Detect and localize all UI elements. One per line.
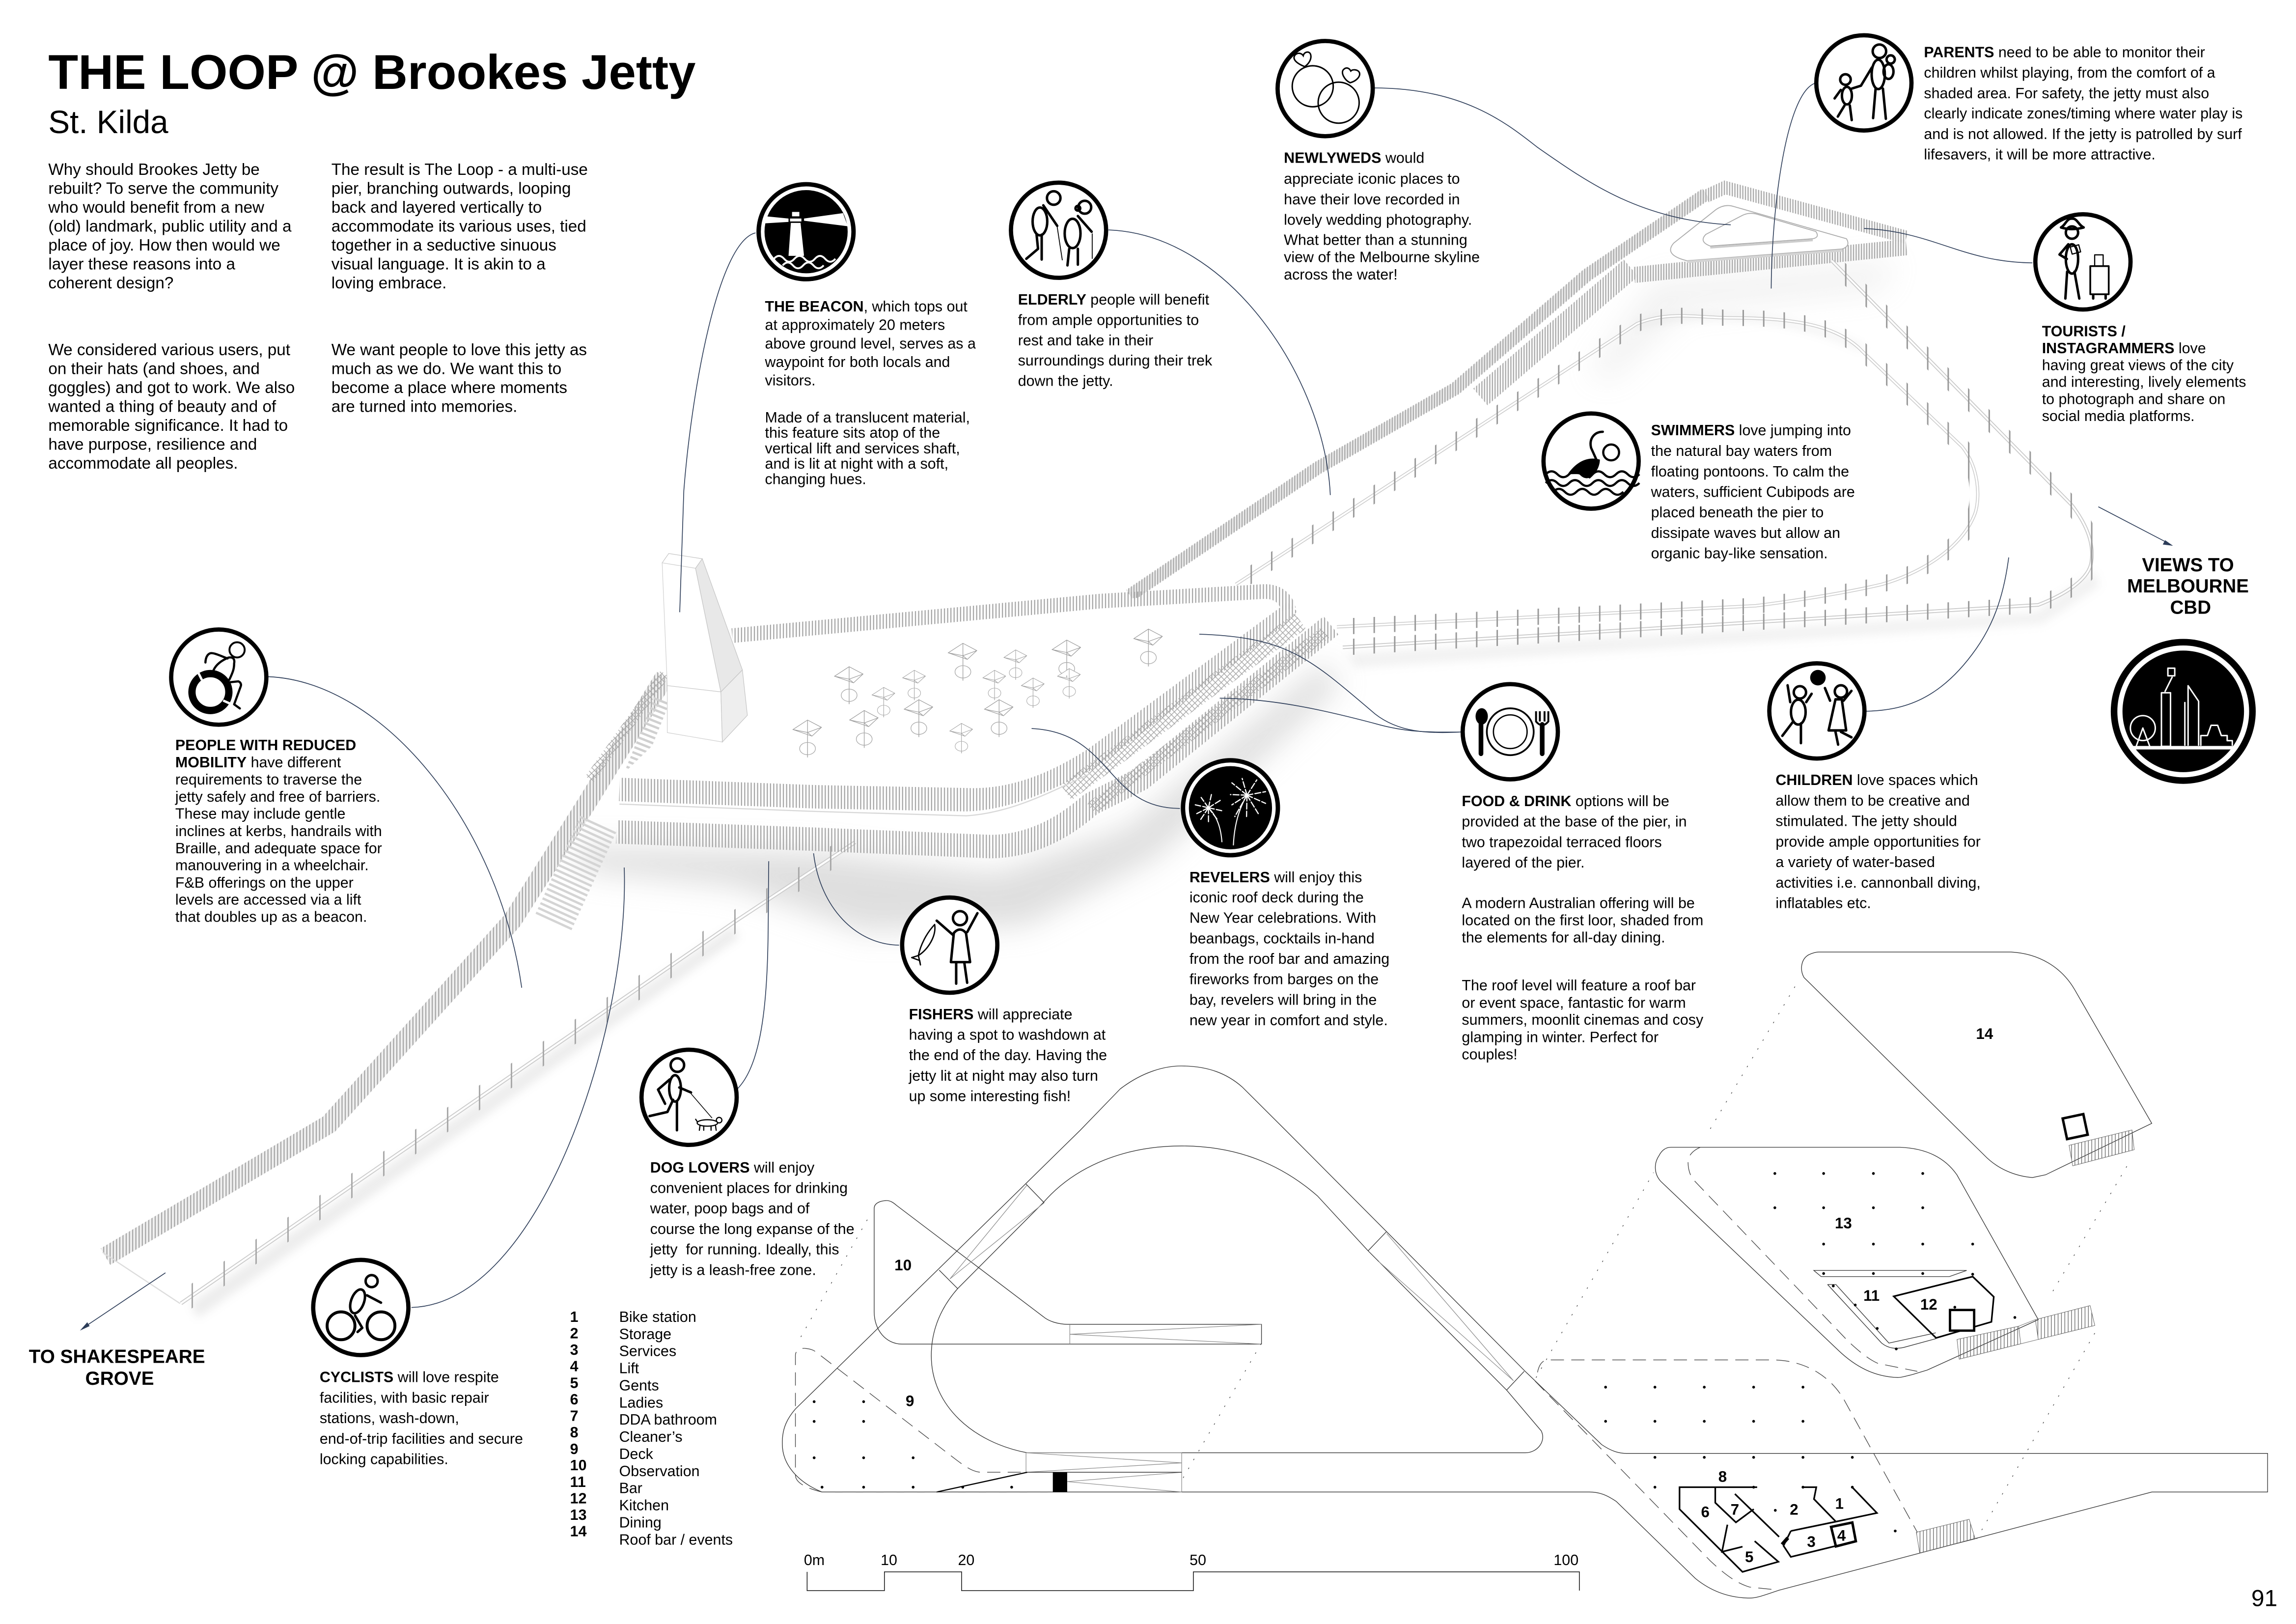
scale bar: 20: [958, 1552, 974, 1568]
text: people with reduced mobility: MOBILITY have different: [175, 754, 341, 771]
text: food and drink: FOOD & DRINK options will be: [1462, 793, 1669, 810]
text: children: activities i.e. cannonball diving,: [1775, 874, 1981, 891]
text: food and drink: The roof level will feature a roof bar: [1462, 977, 1696, 994]
text: tourists: having great views of the city: [2042, 357, 2234, 373]
intro text column 1: (old) landmark, public utility and a: [48, 217, 292, 235]
text: the beacon: waypoint for both locals and: [765, 354, 950, 370]
text: children: provide ample opportunities for: [1775, 833, 1981, 850]
text: swimmers: SWIMMERS love jumping into: [1651, 422, 1851, 439]
intro text column 1: layer these reasons into a: [48, 255, 235, 273]
text: parents: lifesavers, it will be more attractive.: [1924, 146, 2156, 163]
text: children: inflatables etc.: [1775, 895, 1871, 912]
intro text column 1: accommodate all peoples.: [48, 454, 238, 473]
intro text column 2: visual language. It is akin to a: [332, 255, 546, 273]
text: elderly: ELDERLY people will benefit: [1018, 291, 1209, 308]
legend labels: Cleaner’s: [619, 1428, 683, 1445]
text: dog lovers: convenient places for drinking: [650, 1180, 848, 1197]
floor outline: [1656, 1147, 2038, 1377]
text: newlyweds: have their love recorded in: [1284, 191, 1460, 208]
walkway end plate: [103, 1252, 180, 1304]
numbers 1 to 8: 3: [1807, 1533, 1816, 1550]
text: cyclists: end-of-trip facilities and secure: [320, 1430, 523, 1447]
text: revelers: beanbags, cocktails in-hand: [1189, 930, 1375, 947]
fence: end platform top: [1706, 188, 1907, 237]
text: elderly: surroundings during their trek: [1018, 352, 1213, 369]
text: the beacon: vertical lift and services shaft,: [765, 440, 960, 457]
arrow: views to Melbourne CBD: [2098, 507, 2173, 546]
fence: long walkway to upper branch: [1130, 194, 1706, 595]
intro text column 1: wanted a thing of beauty and of: [48, 397, 277, 416]
legend numbers: 12: [570, 1490, 587, 1507]
subtitle: St. Kilda: [48, 104, 168, 140]
text: children: allow them to be creative and: [1775, 792, 1970, 809]
numbers 9 and 10: [894, 1257, 914, 1409]
icon: elderly couple: [1011, 183, 1106, 278]
text: fishers: up some interesting fish!: [909, 1088, 1071, 1105]
fence: upper terrace edge: [619, 603, 1289, 800]
numbers 1 to 8: 7: [1731, 1501, 1739, 1518]
arrow: to Shakespeare Grove: [80, 1273, 166, 1331]
icon: swimmer: [1544, 414, 1639, 509]
text: elderly: down the jetty.: [1018, 373, 1113, 390]
numbers 11 to 13: [1835, 1215, 1937, 1313]
text: food and drink: provided at the base of the pier, in: [1462, 813, 1687, 830]
icon: fireworks: [1181, 758, 1280, 857]
icon: tourist: [2035, 214, 2130, 309]
text: dog lovers: jetty for running. Ideally, this: [650, 1241, 839, 1258]
text: fishers: jetty lit at night may also turn: [909, 1067, 1098, 1084]
icon: fisher: [902, 897, 997, 993]
text: food and drink: couples!: [1462, 1046, 1518, 1063]
legend numbers: 14: [570, 1523, 587, 1540]
stairs beside tower: [633, 700, 662, 773]
axonometric jetty drawing: [103, 188, 2100, 1318]
text: children: stimulated. The jetty should: [1775, 813, 1957, 830]
intro text column 1: Why should Brookes Jetty be: [48, 161, 260, 179]
numbers 11 to 13: 13: [1835, 1215, 1852, 1232]
intro text column 2: back and layered vertically to: [332, 198, 542, 217]
text: food and drink: glamping in winter. Perfect for: [1462, 1029, 1659, 1045]
icon: plate and cutlery: [1463, 684, 1558, 780]
text: people with reduced mobility: PEOPLE WITH REDUCED: [175, 737, 356, 754]
text: elderly: from ample opportunities to: [1018, 311, 1199, 328]
text: revelers: New Year celebrations. With: [1189, 910, 1376, 926]
text: newlyweds: lovely wedding photography.: [1284, 211, 1472, 228]
text: tourists: and interesting, lively elements: [2042, 374, 2246, 391]
text: people with reduced mobility: jetty safely and free of barriers.: [175, 788, 380, 805]
text: tourists: social media platforms.: [2042, 408, 2195, 424]
ramps and cross ticks: [950, 1185, 1514, 1492]
rail: inner water loop: [1236, 316, 1978, 627]
rail: outer water loop: [1343, 261, 2092, 647]
floor plan: ground level: [1535, 1360, 1975, 1590]
text: revelers: from the roof bar and amazing: [1189, 951, 1389, 967]
lift box: [1950, 1310, 1974, 1331]
legend labels: Bar: [619, 1480, 642, 1497]
text: the beacon: Made of a translucent material,: [765, 409, 970, 426]
legend numbers: 4: [570, 1358, 579, 1375]
lift shaft: [1053, 1472, 1067, 1492]
stair landing: [2019, 1319, 2038, 1344]
umbrellas and tables: [793, 629, 1162, 757]
scale bar: 50: [1189, 1552, 1206, 1568]
stairs to first floor: [553, 823, 599, 922]
legend labels: Bike station: [619, 1309, 696, 1325]
numbers 1 to 8: 4: [1837, 1527, 1846, 1544]
inner loop outline: [931, 1146, 1543, 1453]
scale bar: [804, 1552, 1579, 1591]
text: fishers: FISHERS will appreciate: [909, 1006, 1073, 1023]
legend labels: DDA bathroom: [619, 1411, 717, 1428]
legend labels: Ladies: [619, 1394, 663, 1411]
roof stairs: [2069, 1130, 2134, 1166]
stair hatching: [1957, 1306, 2095, 1359]
intro text column 2: We want people to love this jetty as: [332, 341, 587, 359]
text: children: CHILDREN love spaces which: [1775, 772, 1978, 788]
icon: dog walker: [641, 1050, 737, 1145]
numbers 11 to 13: 12: [1920, 1296, 1937, 1313]
fence: second branch: [1480, 268, 1631, 397]
fence: roof deck back edge: [732, 591, 1289, 636]
scale bar: 10: [881, 1552, 897, 1568]
text: dog lovers: jetty is a leash-free zone.: [650, 1261, 816, 1278]
text: tourists: INSTAGRAMMERS love: [2042, 340, 2206, 357]
dashed upper outline: [1538, 1360, 1917, 1532]
entry stairs: [1916, 1519, 1975, 1553]
dotted projection lines between plans: [801, 984, 2127, 1539]
text: food and drink: A modern Australian offering will be: [1462, 895, 1695, 912]
chain balustrade: [589, 621, 1325, 809]
intro text column 2: loving embrace.: [332, 274, 446, 292]
intro text column 1: rebuilt? To serve the community: [48, 179, 278, 197]
legend numbers: 9: [570, 1441, 579, 1457]
numbers 1 to 8: 5: [1745, 1548, 1753, 1566]
callout lines: [268, 84, 2032, 1308]
text: fishers: the end of the day. Having the: [909, 1047, 1107, 1064]
legend numbers: 10: [570, 1457, 587, 1474]
floor plan: lower levels loop: [782, 1066, 2268, 1598]
legend labels: Roof bar / events: [619, 1531, 733, 1548]
text: swimmers: waters, sufficient Cubipods are: [1651, 483, 1855, 500]
text: the beacon: above ground level, serves as a: [765, 336, 976, 352]
legend numbers: 1: [570, 1309, 579, 1325]
legend labels: Gents: [619, 1377, 659, 1394]
intro text column 2: become a place where moments: [332, 379, 567, 397]
text: the beacon: this feature sits atop of the: [765, 424, 940, 441]
page number: 91: [2251, 1585, 2277, 1611]
intro text column 2: pier, branching outwards, looping: [332, 179, 571, 197]
fence: long stair walkway: [106, 677, 665, 1257]
scale bar: 0m: [804, 1552, 825, 1568]
label: to Shakespeare Grove: GROVE: [85, 1368, 154, 1389]
text: children: a variety of water-based: [1775, 854, 1935, 870]
ground floor lift: [1831, 1522, 1856, 1546]
beacon tower: [662, 554, 747, 742]
legend labels: Observation: [619, 1463, 700, 1480]
roof lift box: [2063, 1114, 2088, 1139]
text: revelers: new year in comfort and style.: [1189, 1012, 1388, 1029]
numbers 9 and 10: 10: [894, 1257, 912, 1274]
text: people with reduced mobility: inclines at kerbs, handrails with: [175, 823, 382, 840]
amenity walls: [1680, 1487, 1779, 1572]
legend labels: Dining: [619, 1514, 662, 1531]
text: food and drink: located on the first loor, shaded from: [1462, 912, 1703, 928]
intro text column 1: have purpose, resilience and: [48, 435, 257, 453]
icon: parents: [1816, 35, 1911, 131]
text: the beacon: changing hues.: [765, 471, 866, 488]
legend labels: Kitchen: [619, 1497, 669, 1514]
text: people with reduced mobility: requirements to traverse the: [175, 771, 362, 788]
fence: lower terrace edge: [616, 625, 1331, 846]
text: cyclists: locking capabilities.: [320, 1451, 448, 1468]
text: swimmers: placed beneath the pier to: [1651, 504, 1824, 521]
text: parents: and is not allowed. If the jetty is patrolled by surf: [1924, 126, 2242, 142]
numbers 11 to 13: 11: [1863, 1287, 1880, 1304]
numbers 1 to 8: 2: [1790, 1501, 1798, 1518]
intro text column 1: who would benefit from a new: [48, 198, 265, 217]
label: views to Melbourne CBD: VIEWS TO: [2142, 555, 2234, 576]
numbers 1 to 8: 6: [1701, 1504, 1710, 1521]
numbers 1 to 8: 1: [1835, 1495, 1844, 1512]
text: people with reduced mobility: that doubles up as a beacon.: [175, 909, 367, 925]
text: newlyweds: What better than a stunning: [1284, 232, 1467, 249]
column dots: [814, 1401, 1012, 1487]
scale bar: 100: [1553, 1552, 1578, 1568]
label: views to Melbourne CBD: CBD: [2170, 597, 2211, 618]
text: newlyweds: NEWLYWEDS would: [1284, 150, 1424, 167]
icon: cyclist: [313, 1260, 409, 1355]
text: parents: clearly indicate zones/timing where water play is: [1924, 105, 2242, 122]
intro text column 1: memorable significance. It had to: [48, 417, 288, 435]
legend labels: Storage: [619, 1326, 671, 1343]
text: cyclists: CYCLISTS will love respite: [320, 1369, 499, 1386]
text: elderly: rest and take in their: [1018, 332, 1153, 349]
text: revelers: fireworks from barges on the: [1189, 971, 1379, 988]
legend numbers: 11: [570, 1474, 586, 1490]
intro text column 1: on their hats (and shoes, and: [48, 360, 260, 378]
floor plan: roof: [1801, 952, 2152, 1177]
numbers 9 and 10: 9: [906, 1392, 914, 1409]
legend numbers: 6: [570, 1391, 579, 1408]
legend labels: Services: [619, 1343, 676, 1360]
legend numbers: 13: [570, 1507, 587, 1523]
number 14: 14: [1976, 1025, 1993, 1042]
dashed inner line: [1688, 1147, 1917, 1372]
text: food and drink: summers, moonlit cinemas and cosy: [1462, 1011, 1704, 1028]
intro text column 1: goggles) and got to work. We also: [48, 379, 295, 397]
text: swimmers: the natural bay waters from: [1651, 443, 1832, 459]
icon: newlyweds rings: [1277, 41, 1373, 136]
text: cyclists: stations, wash-down,: [320, 1410, 459, 1427]
text: tourists: TOURISTS /: [2042, 323, 2126, 339]
text: cyclists: facilities, with basic repair: [320, 1389, 489, 1406]
outer loop outline: [782, 1066, 2268, 1598]
text: newlyweds: appreciate iconic places to: [1284, 170, 1460, 187]
dashed lower outline: [1535, 1381, 1779, 1590]
text: parents: PARENTS need to be able to monitor their: [1924, 44, 2205, 61]
text: parents: shaded area. For safety, the jetty must also: [1924, 85, 2209, 102]
text: people with reduced mobility: Braille, and adequate space for: [175, 840, 382, 857]
legend labels: Deck: [619, 1446, 654, 1462]
text: parents: children whilst playing, from the comfort of a: [1924, 64, 2215, 81]
column dots: [1605, 1387, 1895, 1531]
intro text column 2: much as we do. We want this to: [332, 360, 561, 378]
numbers 1 to 8: 8: [1718, 1468, 1727, 1485]
text: newlyweds: view of the Melbourne skyline: [1284, 249, 1480, 266]
text: the beacon: at approximately 20 meters: [765, 317, 945, 334]
text: food and drink: two trapezoidal terraced floors: [1462, 834, 1662, 851]
text: people with reduced mobility: levels are accessed via a lift: [175, 892, 361, 908]
text: the beacon: THE BEACON, which tops out: [765, 298, 968, 315]
icon: wheelchair user: [171, 629, 266, 725]
fence: end platform bottom: [1634, 247, 1907, 275]
text: swimmers: dissipate waves but allow an: [1651, 525, 1840, 541]
text: swimmers: organic bay-like sensation.: [1651, 545, 1828, 561]
text: dog lovers: DOG LOVERS will enjoy: [650, 1159, 814, 1176]
text: people with reduced mobility: manouvering in a wheelchair.: [175, 857, 369, 874]
intro text column 1: We considered various users, put: [48, 341, 290, 359]
title: THE LOOP @ Brookes Jetty: [48, 45, 696, 100]
text: food and drink: or event space, fantastic for warm: [1462, 994, 1686, 1011]
intro text column 1: coherent design?: [48, 274, 173, 292]
legend numbers: 7: [570, 1407, 579, 1424]
rail: walkway to Shakespeare Grove: [181, 842, 855, 1303]
intro text column 2: together in a seductive sinuous: [332, 236, 556, 254]
legend numbers: 5: [570, 1374, 579, 1391]
soft ground shadow: [191, 261, 2100, 1318]
column dots: [1775, 1174, 2015, 1349]
bar counter: [1814, 1270, 1966, 1348]
legend numbers: 3: [570, 1342, 579, 1358]
text: the beacon: visitors.: [765, 372, 816, 389]
text: food and drink: the elements for all-day dining.: [1462, 929, 1665, 946]
deck 9 dashed outline: [796, 1348, 1053, 1492]
text: the beacon: and is lit at night with a soft,: [765, 455, 948, 472]
intro text column 2: are turned into memories.: [332, 397, 517, 416]
roof outline: [1801, 952, 2152, 1177]
text: people with reduced mobility: These may include gentle: [175, 806, 345, 822]
kitchen walls: [1894, 1277, 1994, 1338]
text: swimmers: floating pontoons. To calm the: [1651, 463, 1849, 480]
intro text column 2: The result is The Loop - a multi-use: [332, 161, 588, 179]
text: revelers: REVELERS will enjoy this: [1189, 869, 1362, 886]
text: dog lovers: water, poop bags and of: [650, 1200, 810, 1217]
text: revelers: iconic roof deck during the: [1189, 889, 1364, 906]
icon: Melbourne skyline: [2111, 639, 2256, 784]
text: dog lovers: course the long expanse of the: [650, 1221, 855, 1237]
intro text column 2: accommodate its various uses, tied: [332, 217, 586, 235]
floor plan: first floor: [1656, 1147, 2095, 1377]
icon: children: [1770, 663, 1864, 758]
text: newlyweds: across the water!: [1284, 266, 1398, 283]
legend numbers: 2: [570, 1325, 579, 1342]
intro text column 1: place of joy. How then would we: [48, 236, 280, 254]
icon: beacon lighthouse: [756, 182, 856, 281]
label: to Shakespeare Grove: TO SHAKESPEARE: [29, 1346, 205, 1368]
door mark: [1782, 1538, 1788, 1544]
text: people with reduced mobility: F&B offerings on the upper: [175, 874, 354, 891]
text: tourists: to photograph and share on: [2042, 391, 2225, 408]
text: revelers: bay, revelers will bring in the: [1189, 991, 1377, 1008]
legend numbers: 8: [570, 1424, 579, 1441]
legend labels: Lift: [619, 1360, 639, 1377]
text: food and drink: layered of the pier.: [1462, 854, 1585, 871]
observation deck 10: [874, 1201, 1262, 1344]
end platform triangle: [1671, 205, 1848, 262]
numbers 1 to 8: [1701, 1468, 1846, 1566]
label: views to Melbourne CBD: MELBOURNE: [2127, 576, 2249, 597]
roof deck surface: [624, 588, 1287, 788]
text: fishers: having a spot to washdown at: [909, 1026, 1106, 1043]
